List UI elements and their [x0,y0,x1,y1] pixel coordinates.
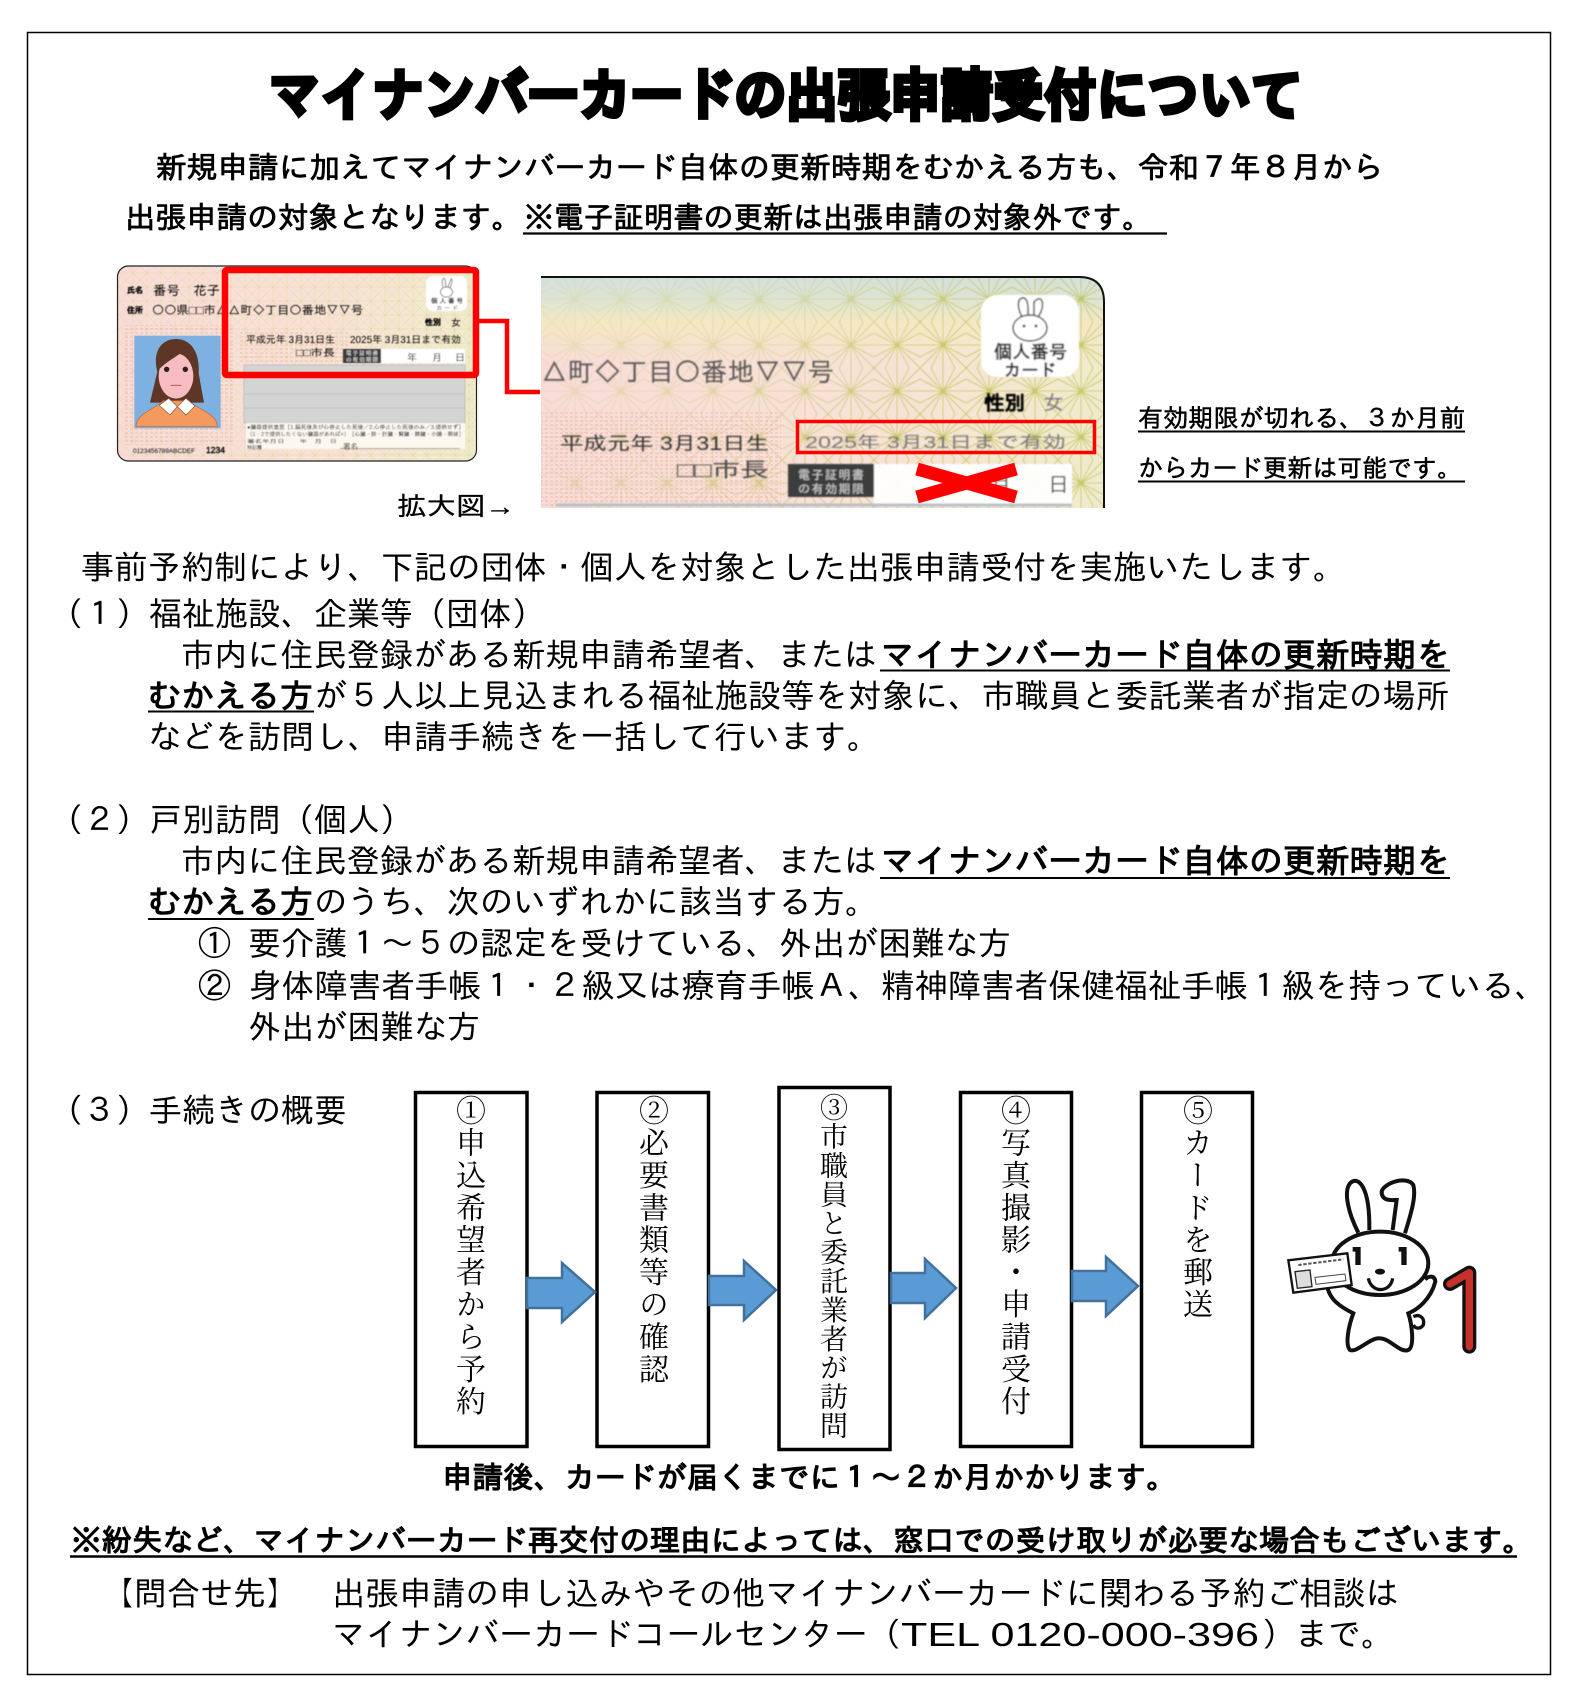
card details text: 月 [432,353,442,364]
step 2 text: ②必要書類等の確認 [634,1095,667,1386]
section 1: welfare facilities: 市内に住民登録がある新規申請希望者、または [181,636,877,674]
card details text: 番号 花子 [153,283,220,298]
card details text: 電子証明書 [346,350,378,357]
arrow 2 [709,1261,776,1320]
section 2: home visits: むかえる方 [148,884,313,920]
card details text: 〇〇県□□市△△町◇丁目〇番地▽▽号 [152,304,363,317]
enlarged card text: 日 [1048,474,1069,497]
section 2: home visits: 身体障害者手帳１・２級又は療育手帳Ａ、精神障害者保健福祉手帳１級を持っている、 [248,968,1548,1004]
step box 3 [779,1088,890,1450]
section 1: welfare facilities: （１）福祉施設、企業等（団体） [50,596,545,632]
red cross mark [917,469,1016,497]
enlarged card text: △町◇丁目〇番地▽▽号 [541,357,834,387]
card details text: ●臓器提供意思［1.脳死後及び心停止した死後／2.心停止した死後のみ／3.提供せず］ [247,423,464,431]
reissue warning: ※紛失など、マイナンバーカード再交付の理由によっては、窓口での受け取りが必要な場合もございます。 [71,1525,1533,1558]
delivery note: 申請後、カードが届くまでに１～２か月かかります。 [442,1462,1177,1495]
step box 4 [960,1092,1072,1446]
contact information: ）まで。 [1262,1616,1394,1653]
card details text: カード [436,305,458,312]
intro text: ※電子証明書の更新は出張申請の対象外です。 [524,202,1152,235]
arrow 4 [1072,1257,1138,1316]
enlarged card text: 2025年 3月31日まで有効 [805,433,1066,452]
card details text: 1234 [206,445,225,455]
contact information: 【問合せ先】 [101,1575,299,1612]
card details text: 2025年 3月31日まで有効 [350,334,461,346]
enlarged card text: 月 [990,472,1012,497]
renewal note: からカード更新は可能です。 [1138,455,1462,483]
section 2: home visits: 市内に住民登録がある新規申請希望者、または [181,842,877,880]
connector between card and enlarged view [479,321,540,392]
section 2: home visits: マイナンバーカード自体の更新時期を [881,842,1450,880]
card details text: 署名 [343,442,358,451]
section 2: home visits: 外出が困難な方 [248,1008,480,1046]
section 1: welfare facilities: むかえる方 [148,678,313,714]
contact information: 出張申請の申し込みやその他マイナンバーカードに関わる予約ご相談は [332,1575,1399,1612]
card details text: 女 [451,317,461,329]
enlarged card text: □□市長 [677,459,769,482]
intro text: 新規申請に加えてマイナンバーカード自体の更新時期をむかえる方も、令和７年８月から [156,152,1383,185]
card details text: 年 [407,352,417,364]
contact information: マイナンバーカードコールセンター（ [332,1616,901,1653]
section 2: home visits [50,802,1548,1046]
step 3 text: ③市職員と委託業者が訪問 [816,1093,847,1440]
section 1: welfare facilities [50,596,1450,756]
card details text: 個人番号 [431,297,464,305]
section 1: welfare facilities: が５人以上見込まれる福祉施設等を対象に、市職員と委託業者が指定の場所 [314,678,1449,714]
enlarged card text: 平成元年 3月31日生 [560,434,769,455]
card details text: （1・2で提供したくない臓器があれば×）［心臓・肺・肝臓・腎臓・膵臓・小腸・眼球］ [247,431,464,438]
arrow 1 [527,1263,595,1322]
step box 5 [1142,1092,1252,1446]
section 2: home visits: （２）戸別訪問（個人） [50,802,413,838]
contact information: TEL 0120-000-396 [901,1616,1259,1653]
step 5 text: ⑤カードを郵送 [1178,1095,1211,1321]
enlarged card text: 個人番号 [994,342,1067,362]
enlarged card text: 電子証明書 [798,468,864,482]
enlarged card text: 女 [1043,392,1064,415]
card details text: 平成元年 3月31日生 [246,334,335,346]
card details text: 署名年月日 年 月 日 [247,438,337,445]
card details text: 住所 [127,306,143,315]
red highlight frame on card [225,270,476,375]
intro text: 出張申請の対象となります。 [125,202,522,235]
section 2: home visits: ① [198,925,231,962]
card details text: 氏名 [127,286,143,295]
step box 2 [597,1092,708,1446]
contact information [101,1575,1399,1653]
enlarged card text [541,295,1079,506]
card image: My Number card [118,266,476,461]
section 1: welfare facilities: などを訪問し、申請手続きを一括して行います。 [148,718,880,756]
intro text [125,152,1383,235]
step 4 text: ④写真撮影・申請受付 [996,1095,1029,1418]
enlarged view caption: 拡大図→ [397,493,515,521]
enlarged card text: カード [1004,361,1056,380]
section 2: home visits: ② [198,968,231,1004]
mascot: Mynah rabbit holding card [1288,1180,1469,1350]
section 2: home visits: のうち、次のいずれかに該当する方。 [314,884,878,920]
enlarged card view [541,277,1104,508]
section 1: welfare facilities: マイナンバーカード自体の更新時期を [881,636,1450,674]
enlarged card text: の有効期限 [798,482,864,496]
card details text: 性別 [425,318,441,327]
step box 1 [416,1092,527,1446]
arrow 3 [891,1259,956,1318]
card details text: の有効期限 [346,356,378,364]
card details text: 日 [455,353,465,364]
section 2: home visits: 要介護１～５の認定を受けている、外出が困難な方 [248,925,1011,962]
card photo [134,336,221,428]
step 1 text: ①申込希望者から予約 [451,1095,484,1418]
card details text: 特記欄 [247,445,262,451]
card details text: 0123456789ABCDEF [133,448,195,455]
title: マイナンバーカードの出張申請受付について [269,64,1303,127]
renewal note: 有効期限が切れる、３か月前 [1138,405,1465,433]
card details text [127,276,467,455]
red highlight: expiry date [798,422,1094,452]
enlarged card text: 性別 [984,393,1025,415]
card details text: □□市長 [296,348,335,359]
renewal note [1138,405,1465,483]
reservation lead: 事前予約制により、下記の団体・個人を対象とした出張申請受付を実施いたします。 [81,549,1346,586]
section 3 heading: （３）手続きの概要 [50,1092,347,1129]
